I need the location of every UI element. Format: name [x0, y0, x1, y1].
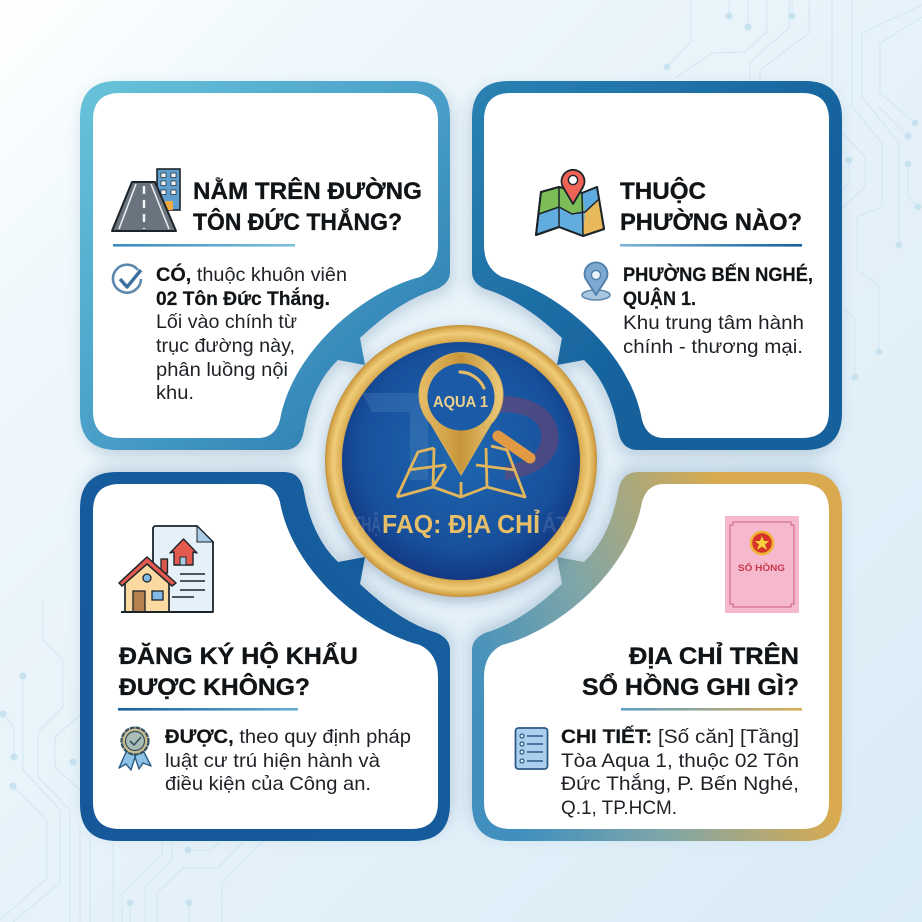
- body text: pink book address: Tòa Aqua 1, thuộc 02 Tôn: [561, 750, 799, 772]
- heading: ward: THUỘC: [620, 177, 706, 205]
- panel frame: top left: [80, 81, 450, 450]
- panel frame: bottom left: [80, 472, 450, 841]
- body text: ward: Khu trung tâm hành: [623, 312, 804, 334]
- body text: street: trục đường này,: [156, 335, 295, 357]
- blue disc: [342, 342, 580, 580]
- icon: house and document: [119, 526, 213, 612]
- heading: street: [193, 177, 422, 236]
- body text: household registration: luật cư trú hiện hành và: [165, 750, 380, 772]
- heading: street: NẰM TRÊN ĐƯỜNG: [193, 177, 422, 205]
- heading: pink book address: SỔ HỒNG GHI GÌ?: [582, 673, 799, 701]
- panel: ward question: [472, 81, 842, 450]
- body text: pink book address: [561, 725, 799, 819]
- heading: ward: [620, 177, 802, 236]
- panel frame: bottom right: [472, 472, 842, 841]
- icon: folded map with pin: [536, 170, 604, 236]
- panel: household registration question: [80, 472, 450, 841]
- heading: household registration: ĐƯỢC KHÔNG?: [119, 673, 310, 701]
- heading: street: TÔN ĐỨC THẮNG?: [193, 208, 402, 236]
- body text: pink book address: Q.1, TP.HCM.: [561, 797, 677, 819]
- heading: pink book address: ĐỊA CHỈ TRÊN: [629, 641, 799, 670]
- icon: location pin: [582, 262, 610, 300]
- body text: ward: chính - thương mại.: [623, 336, 803, 358]
- body text: street: phân luồng nội: [156, 359, 288, 381]
- body text: pink book address: CHI TIẾT: [Số căn] [Tầng]: [561, 725, 799, 748]
- panel frame: top right: [472, 81, 842, 450]
- heading: ward: PHƯỜNG NÀO?: [620, 208, 802, 236]
- body text: ward: QUẬN 1.: [623, 286, 696, 310]
- heading: household registration: [119, 642, 358, 701]
- body text: street: khu.: [156, 382, 194, 404]
- icon: pink book: SỔ HỒNG: [738, 562, 785, 574]
- body text: street: 02 Tôn Đức Thắng.: [156, 286, 330, 310]
- icon: checklist: [516, 728, 548, 769]
- icon: gold pin lens: [419, 353, 503, 475]
- body text: household registration: điều kiện của Công an.: [165, 773, 371, 795]
- panel surface: bottom right: [484, 484, 829, 829]
- body text: household registration: [165, 726, 411, 795]
- badge label: aqua: AQUA 1: [433, 394, 488, 411]
- gold ring: [325, 325, 597, 597]
- body text: street: Lối vào chính từ: [156, 311, 297, 333]
- watermark logo: [362, 393, 559, 480]
- icon: pink book: [725, 516, 799, 613]
- body text: street: CÓ, thuộc khuôn viên: [156, 262, 347, 286]
- body text: pink book address: Đức Thắng, P. Bến Nghé,: [561, 772, 799, 795]
- panel: street question: [80, 81, 450, 450]
- panel surface: top left: [93, 93, 438, 438]
- panel surface: bottom left: [93, 484, 438, 829]
- panel: pink book address question: [472, 472, 842, 841]
- icon: road and building: [112, 169, 180, 231]
- heading: pink book address: [582, 641, 799, 701]
- body text: street: [156, 262, 347, 404]
- watermark text: left fragment: THẬ: [353, 512, 381, 537]
- body text: ward: [623, 262, 813, 358]
- panel surface: top right: [484, 93, 829, 438]
- icon: rosette badge: [119, 728, 151, 770]
- body text: household registration: ĐƯỢC, theo quy định pháp: [165, 726, 411, 748]
- icon: gold map: [397, 446, 525, 497]
- heading: household registration: ĐĂNG KÝ HỘ KHẨU: [119, 642, 358, 670]
- icon: magnifier handle: [498, 436, 530, 458]
- icon: check mark: [113, 265, 141, 293]
- watermark text: right fragment: ÁT: [542, 512, 570, 537]
- body text: ward: PHƯỜNG BẾN NGHÉ,: [623, 262, 813, 286]
- center medallion: [325, 325, 597, 597]
- badge title: FAQ: ĐỊA CHỈ: [382, 509, 540, 539]
